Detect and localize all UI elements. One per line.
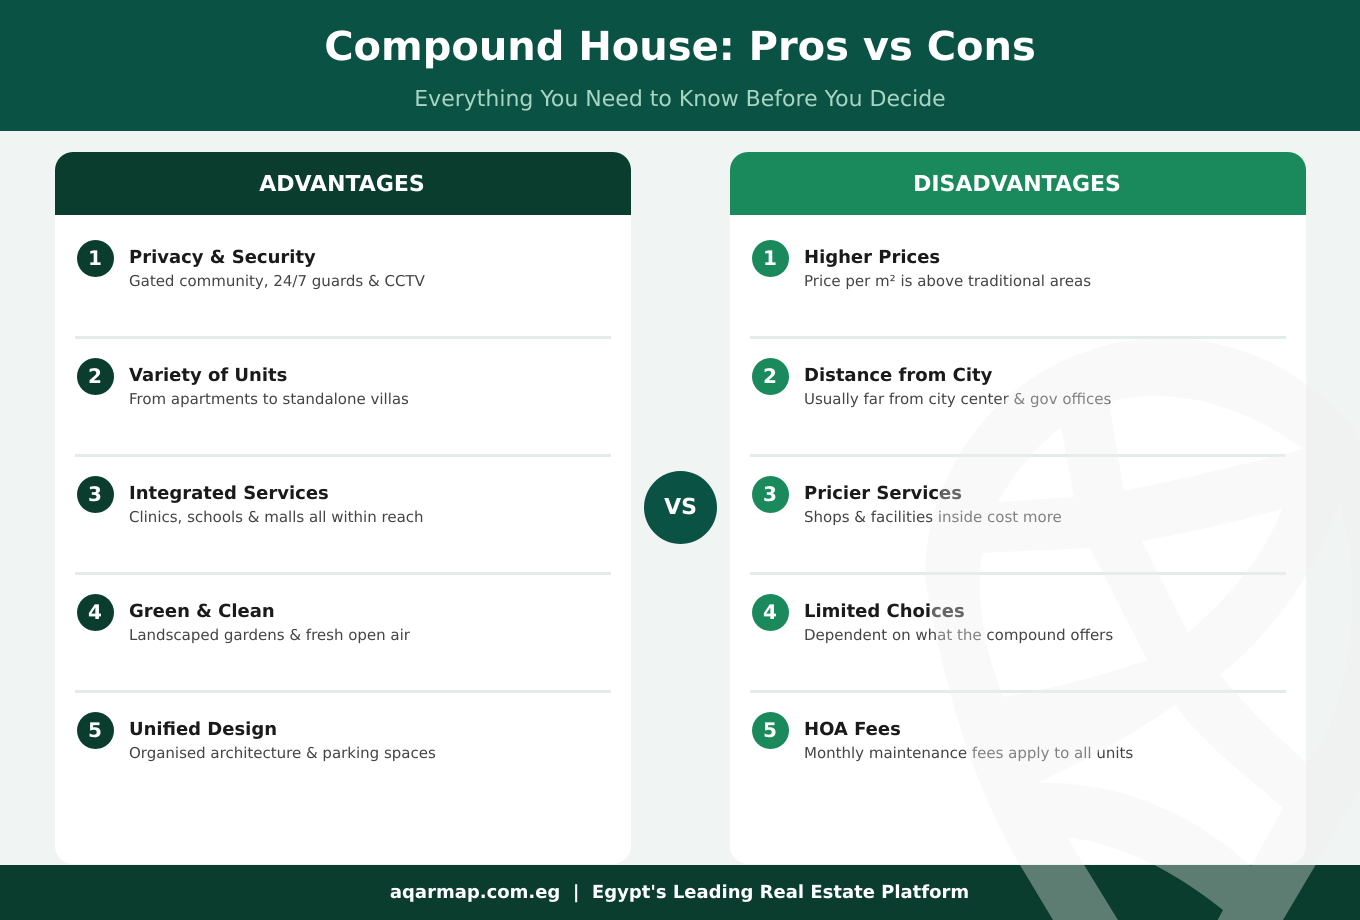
badge 2: 2 — [88, 364, 102, 388]
advantage 1 — [77, 240, 425, 290]
advantage 4 title: Green & Clean — [129, 601, 275, 622]
panel: disadvantages — [730, 152, 1306, 864]
disadvantage 1 title: Higher Prices — [804, 247, 940, 268]
advantage 2 description: From apartments to standalone villas — [129, 390, 409, 408]
badge 5: 5 — [88, 718, 102, 742]
disadvantage 1 — [752, 240, 1091, 290]
disadvantage 5 title: HOA Fees — [804, 719, 901, 740]
disadvantage 3 description: Shops & facilities inside cost more — [804, 508, 1062, 526]
badge 1: 1 — [88, 246, 102, 270]
disadvantage 4 description: Dependent on what the compound offers — [804, 626, 1113, 644]
badge 4 — [752, 594, 789, 631]
disadvantage 4 title: Limited Choices — [804, 601, 965, 622]
footer: aqarmap.com.eg | Egypt's Leading Real Estate Platform — [390, 882, 969, 903]
advantage 3 description: Clinics, schools & malls all within reach — [129, 508, 424, 526]
badge 2: 2 — [763, 364, 777, 388]
advantage 1 title: Privacy & Security — [129, 247, 316, 268]
advantage 2 — [77, 358, 409, 408]
panel: advantages — [55, 152, 631, 864]
badge 4: 4 — [88, 600, 102, 624]
disadvantage 5 — [752, 712, 1133, 762]
advantage 4 — [77, 594, 410, 644]
disadvantage 2 description: Usually far from city center & gov offices — [804, 390, 1111, 408]
advantage 1 description: Gated community, 24/7 guards & CCTV — [129, 272, 425, 290]
badge 5: 5 — [763, 718, 777, 742]
disadvantage 3 — [752, 476, 1062, 526]
badge 2 — [77, 358, 114, 395]
badge 1: 1 — [763, 246, 777, 270]
disadvantage 1 description: Price per m² is above traditional areas — [804, 272, 1091, 290]
disadvantage 2 — [752, 358, 1111, 408]
advantage 3 — [77, 476, 424, 526]
badge 3 — [752, 476, 789, 513]
advantage 5 title: Unified Design — [129, 719, 277, 740]
badge 5 — [752, 712, 789, 749]
VS badge: VS — [664, 495, 697, 520]
disadvantages heading: DISADVANTAGES — [913, 172, 1121, 197]
badge 2 — [752, 358, 789, 395]
advantage 2 title: Variety of Units — [129, 365, 287, 386]
badge 1 — [752, 240, 789, 277]
advantage 3 title: Integrated Services — [129, 483, 329, 504]
disadvantage 5 description: Monthly maintenance fees apply to all units — [804, 744, 1133, 762]
header band — [0, 0, 1360, 131]
footer — [0, 865, 1360, 920]
badge 3 — [77, 476, 114, 513]
badge 4: 4 — [763, 600, 777, 624]
advantage 5 description: Organised architecture & parking spaces — [129, 744, 436, 762]
badge 5 — [77, 712, 114, 749]
subtitle: Everything You Need to Know Before You Decide — [414, 87, 946, 112]
disadvantage 3 title: Pricier Services — [804, 483, 962, 504]
badge 1 — [77, 240, 114, 277]
disadvantages heading background — [730, 152, 1306, 215]
disadvantage 2 title: Distance from City — [804, 365, 992, 386]
badge 3: 3 — [763, 482, 777, 506]
title: Compound House: Pros vs Cons — [324, 24, 1036, 70]
badge 3: 3 — [88, 482, 102, 506]
VS badge — [644, 471, 717, 544]
advantages heading: ADVANTAGES — [259, 172, 425, 197]
badge 4 — [77, 594, 114, 631]
advantage 5 — [77, 712, 436, 762]
advantages heading background — [55, 152, 631, 215]
disadvantage 4 — [752, 594, 1113, 644]
advantage 4 description: Landscaped gardens & fresh open air — [129, 626, 410, 644]
